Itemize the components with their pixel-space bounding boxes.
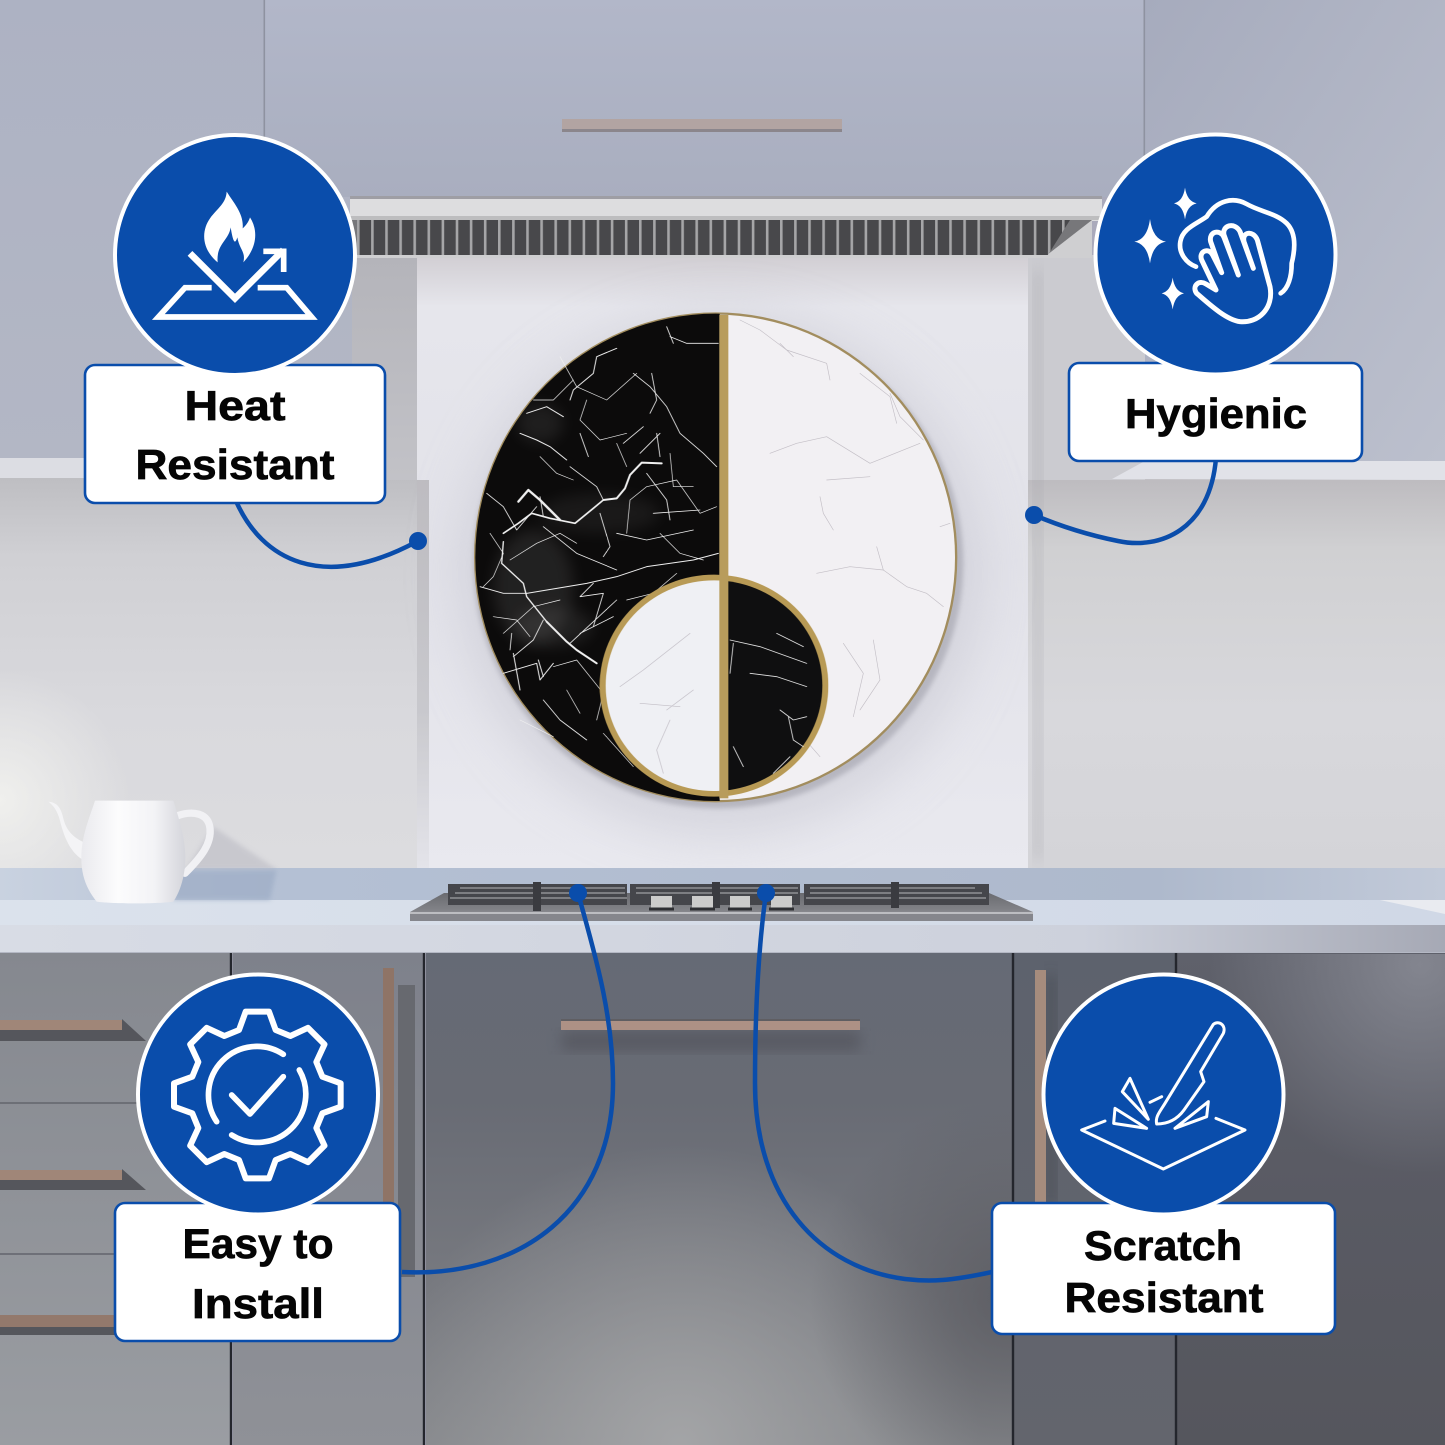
label box: scratch resistant: Scratch xyxy=(1084,1222,1242,1269)
label box: hygienic xyxy=(1069,363,1362,461)
white veins on black marble xyxy=(480,327,718,767)
gold rim xyxy=(474,312,957,802)
grey veins on white marble xyxy=(740,320,950,757)
wall under left cabinet xyxy=(352,255,418,480)
connector: hygienic xyxy=(1025,458,1216,543)
lower cabinets xyxy=(0,953,1445,1445)
label box: heat resistant: Resistant xyxy=(136,441,335,488)
under-cabinet strips and wall lighting xyxy=(0,270,1445,868)
callout: easy to install xyxy=(115,884,613,1341)
splashback panel xyxy=(417,258,1028,868)
label box: heat resistant xyxy=(85,365,385,503)
label box: heat resistant: Heat xyxy=(184,382,286,429)
callout: hygienic xyxy=(1025,134,1362,543)
small circle gold ring xyxy=(600,575,828,797)
wall right xyxy=(1028,478,1445,870)
veins in small circle xyxy=(620,633,807,773)
marble disc artwork xyxy=(473,312,963,808)
teapot shadow xyxy=(173,827,277,900)
icon: flame over surface with arrow xyxy=(158,192,312,317)
cooktop xyxy=(410,882,1033,921)
upper cabinets xyxy=(0,0,1445,461)
label box: scratch resistant: Resistant xyxy=(1064,1274,1264,1321)
white teapot xyxy=(48,801,210,903)
wall beside panel right xyxy=(1028,255,1145,480)
black marble half xyxy=(475,314,720,801)
disc shadow xyxy=(473,318,963,808)
callout: scratch resistant xyxy=(755,884,1335,1334)
small circle white half xyxy=(606,580,720,791)
label box: scratch resistant xyxy=(992,1203,1335,1334)
cabinet handles xyxy=(0,119,1056,1335)
range hood xyxy=(350,196,1102,258)
label box: easy to install xyxy=(115,1203,400,1341)
icon: hand wiping with sparkles xyxy=(1134,188,1294,322)
label box: hygienic: Hygienic xyxy=(1125,390,1307,437)
label box: easy to install: Install xyxy=(192,1280,324,1327)
connector: heat resistant xyxy=(236,501,427,567)
callout: heat resistant xyxy=(85,135,427,567)
countertop xyxy=(0,868,1445,954)
badge: easy to install xyxy=(138,974,378,1214)
badge: hygienic xyxy=(1096,134,1336,374)
gold centre strip xyxy=(719,315,728,798)
marble haze on black half xyxy=(493,403,660,647)
connector: scratch resistant xyxy=(755,884,992,1281)
white marble half xyxy=(476,315,955,800)
badge: heat resistant xyxy=(115,135,355,375)
label box: easy to install: Easy to xyxy=(182,1220,334,1267)
icon: knife scratching surface xyxy=(1082,1023,1245,1169)
small circle black half xyxy=(728,581,823,790)
badge: scratch resistant xyxy=(1044,974,1284,1214)
icon: gear with check mark xyxy=(174,1012,341,1178)
wall left xyxy=(0,478,418,870)
connector: easy to install xyxy=(402,884,613,1272)
